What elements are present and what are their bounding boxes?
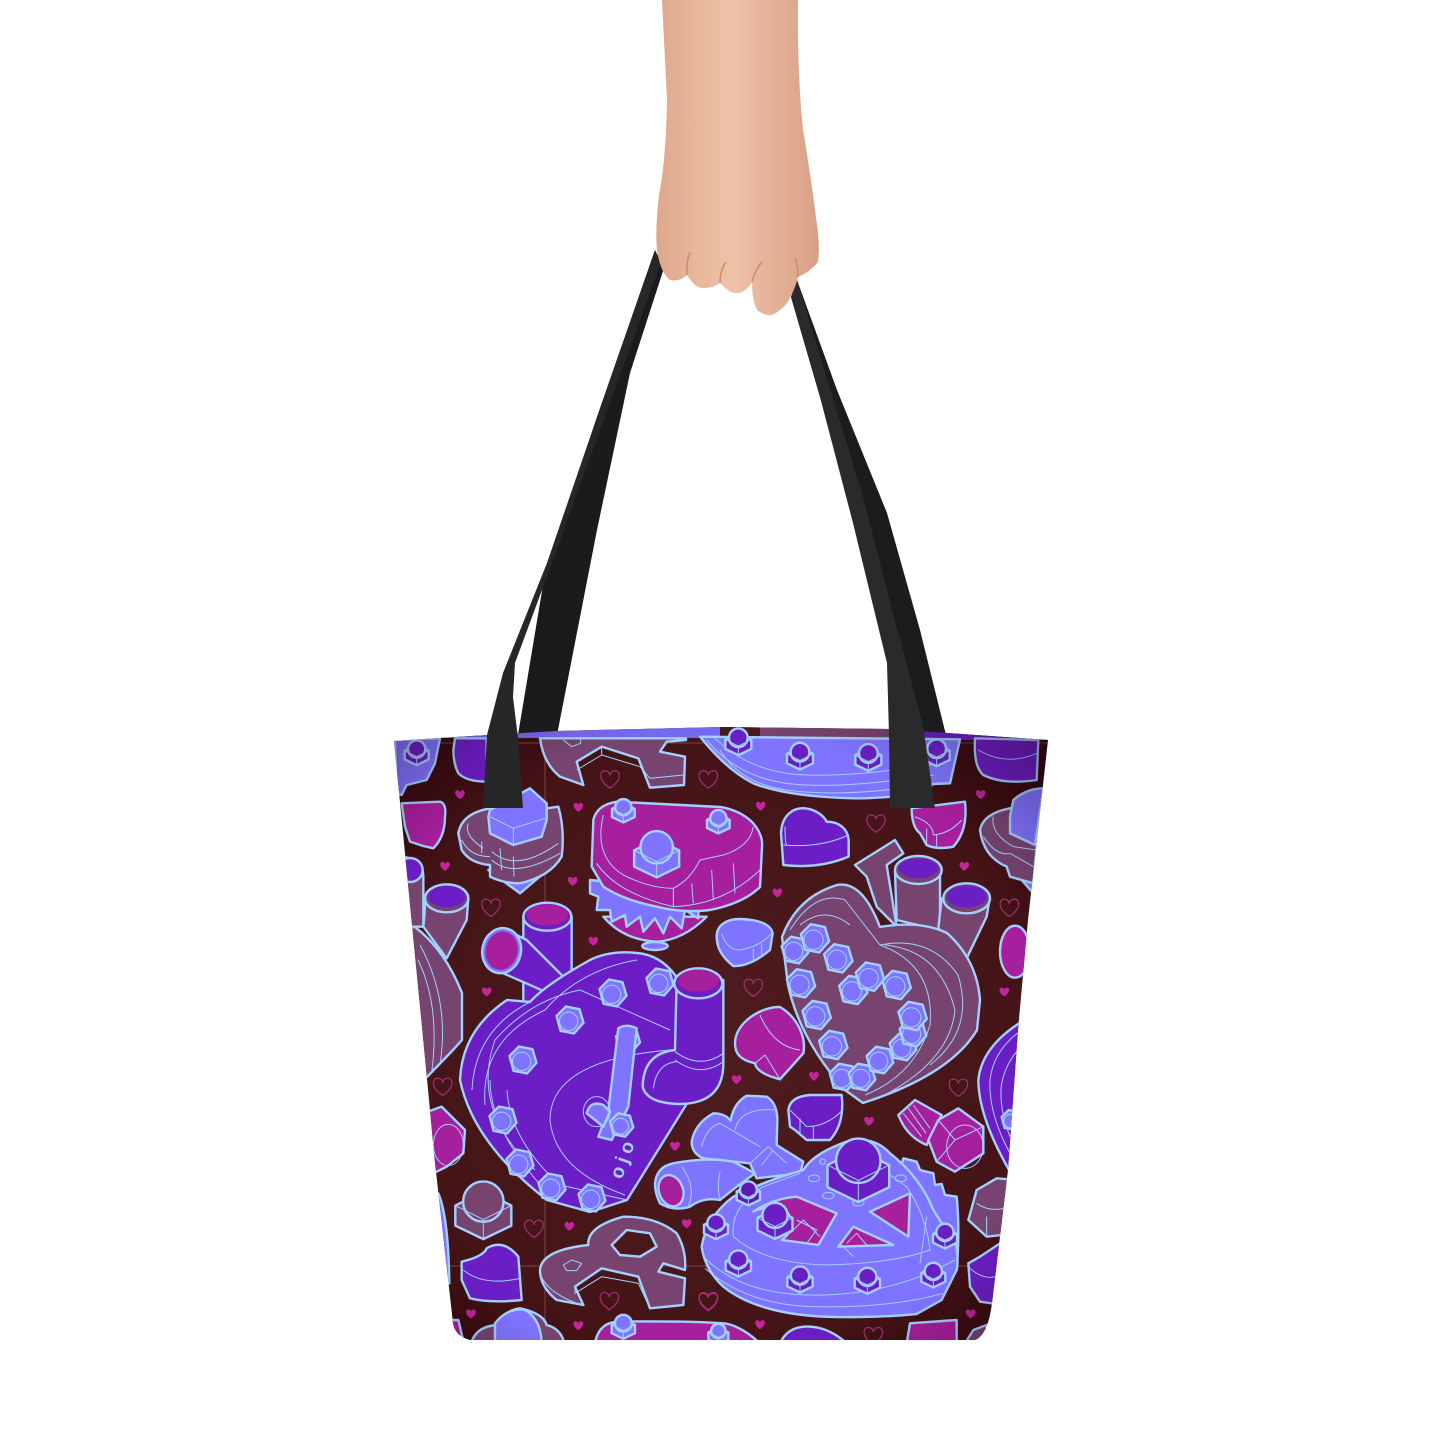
purple heart xyxy=(462,1245,522,1301)
large purple pump heart xyxy=(460,903,723,1212)
top wrench xyxy=(540,738,686,788)
lever, nut and logo xyxy=(583,1026,640,1182)
hex bolts on heart xyxy=(490,968,674,1212)
mauve heart with bolt ring xyxy=(782,885,980,1103)
lavender sliver xyxy=(438,1192,450,1284)
magenta heart xyxy=(912,802,966,848)
left edge pipes xyxy=(397,857,468,958)
tiny hearts, lower left xyxy=(466,1142,691,1330)
pattern, upper left xyxy=(395,738,762,997)
pattern, lower left xyxy=(423,1078,760,1344)
lavender small heart xyxy=(717,919,773,966)
seam lines xyxy=(400,738,1048,1340)
pattern, lower right xyxy=(654,1007,1022,1345)
top lavender valve disc xyxy=(700,728,960,798)
magenta small heart xyxy=(402,802,445,848)
mauve capped nut xyxy=(455,1181,511,1239)
front strap, left xyxy=(483,250,660,808)
edge shading xyxy=(385,720,1065,1350)
corner magenta sliver xyxy=(447,1320,463,1342)
purple heart xyxy=(781,808,849,866)
outlined hearts, upper right xyxy=(744,815,1019,996)
right edge magenta pipe xyxy=(1000,926,1030,978)
pattern, upper right xyxy=(700,728,1043,978)
back strap, left xyxy=(518,250,664,735)
gear heart xyxy=(590,799,762,950)
wrench xyxy=(540,1217,685,1308)
heart body xyxy=(460,952,700,1212)
right purple pump xyxy=(978,1022,1022,1172)
lever, nut and logo: ojo xyxy=(607,1138,640,1182)
bottom magenta heart xyxy=(595,1315,760,1344)
back strap, right xyxy=(791,280,946,735)
bolt ring xyxy=(744,790,1019,1090)
outlined hearts, lower left xyxy=(433,1078,718,1310)
outlined hearts xyxy=(482,771,718,916)
hex head bolt xyxy=(898,1100,983,1172)
upper pipes xyxy=(478,903,572,1003)
bag body xyxy=(385,720,1065,1350)
front strap, right xyxy=(791,280,935,808)
outlined hearts, lower right xyxy=(699,1079,968,1345)
product photo: tote bag held by hand xyxy=(394,0,1048,1340)
inside rim of bag xyxy=(440,727,1048,740)
left edge mauve pump heart xyxy=(412,926,464,1078)
lavender valve heart xyxy=(702,1139,958,1317)
purple small heart xyxy=(788,1095,843,1140)
stacked heart, right edge xyxy=(980,788,1043,893)
magenta heart xyxy=(735,1007,804,1079)
mauve nut, right xyxy=(968,1178,1017,1237)
tiny hearts, lower right xyxy=(670,1072,975,1329)
stacked heart with hex bolt xyxy=(458,788,563,893)
hidden bolt behind lever xyxy=(616,1028,640,1052)
purple heart, right xyxy=(968,1243,1013,1303)
right elbow pipe xyxy=(643,980,723,1104)
lavender corner bolt shape xyxy=(395,738,440,795)
hand xyxy=(656,0,819,315)
tiny hearts xyxy=(440,790,598,997)
bolted mauve heart pipes xyxy=(855,840,990,958)
purple cylinder xyxy=(453,738,487,782)
bottom pieces xyxy=(780,1320,987,1343)
bottom mauve stack xyxy=(472,1308,564,1342)
purple cylinder, right xyxy=(975,738,1038,782)
tiny hearts, upper right xyxy=(756,790,1009,997)
magenta nut xyxy=(423,1107,465,1172)
fabric background xyxy=(385,720,1065,1350)
valve pipes xyxy=(654,1096,803,1210)
